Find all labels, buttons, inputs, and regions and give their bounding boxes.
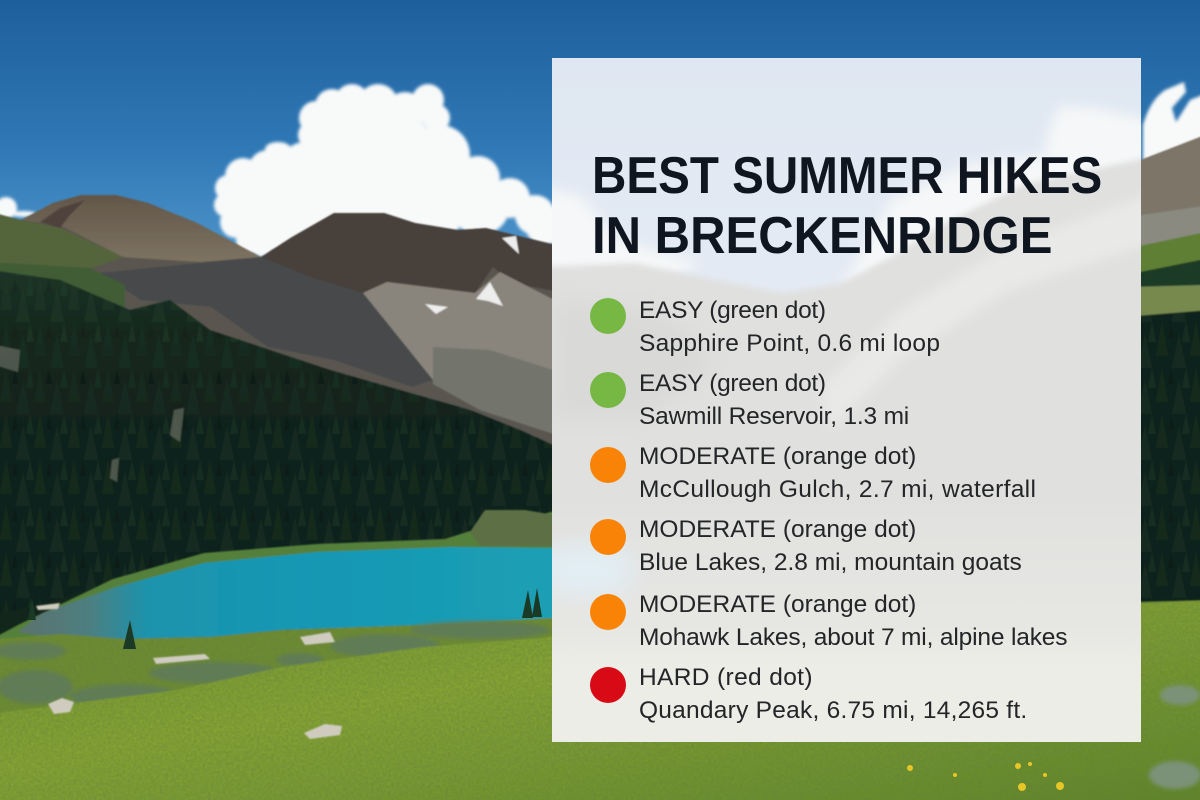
- hike: Sawmill Reservoir: [590, 370, 909, 430]
- hike: Mohawk Lakes: MODERATE (orange dot): [639, 591, 916, 618]
- front meadow: [0, 600, 1200, 800]
- hike: Quandary Peak: Quandary Peak, 6.75 mi, 14,265 ft.: [639, 697, 1027, 724]
- back meadow: [0, 600, 1200, 800]
- hike: Sapphire Point: [590, 297, 940, 357]
- lakeside trees: [28, 588, 542, 649]
- forest rock outcrops: [0, 345, 184, 482]
- hike: McCullough Gulch: MODERATE (orange dot): [639, 443, 916, 470]
- hike: Blue Lakes: Blue Lakes, 2.8 mi, mountain goats: [639, 549, 1022, 576]
- yellow wildflowers: [907, 762, 1064, 791]
- hike: Quandary Peak: HARD (red dot): [639, 664, 813, 691]
- hike: Mohawk Lakes: [590, 591, 1067, 651]
- hike: Sapphire Point: EASY (green dot): [639, 297, 826, 324]
- far shore grass: [0, 510, 560, 645]
- hike: Sawmill Reservoir: EASY (green dot): [639, 370, 826, 397]
- hike: Sapphire Point: Sapphire Point, 0.6 mi loop: [639, 330, 940, 357]
- mountain range: left and centre: [0, 195, 560, 460]
- hike: Quandary Peak: [590, 664, 1027, 724]
- hike: Mohawk Lakes: Mohawk Lakes, about 7 mi, alpine lakes: [639, 624, 1067, 651]
- lake: [18, 547, 560, 639]
- right mountain: [1135, 133, 1200, 615]
- title: [592, 147, 1102, 265]
- hike: Sawmill Reservoir: Sawmill Reservoir, 1.3 mi: [639, 403, 909, 430]
- shrubs: [0, 621, 550, 710]
- hike: Blue Lakes: [590, 516, 1022, 576]
- sky: [0, 0, 1200, 300]
- rocks: [36, 603, 342, 739]
- title: IN BRECKENRIDGE: [592, 207, 1052, 265]
- hike: McCullough Gulch: McCullough Gulch, 2.7 mi, waterfall: [639, 476, 1036, 503]
- right meadow clumps: [1149, 685, 1200, 789]
- hike: McCullough Gulch: [590, 443, 1036, 503]
- hike: Blue Lakes: MODERATE (orange dot): [639, 516, 916, 543]
- panel: hike list: [552, 58, 1141, 742]
- title: BEST SUMMER HIKES: [592, 147, 1102, 205]
- forest: [0, 270, 560, 615]
- clouds: [0, 82, 1200, 257]
